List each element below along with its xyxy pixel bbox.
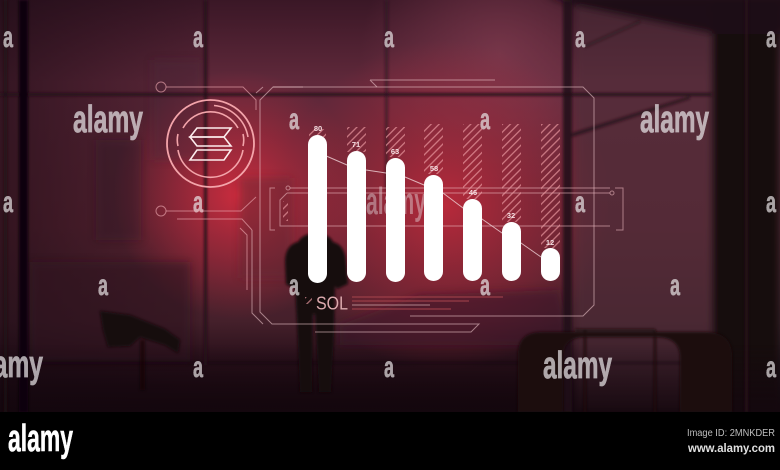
- bar value labels: 46: [469, 188, 477, 197]
- watermark: small a marks: a: [480, 103, 490, 136]
- trend line: [317, 152, 541, 257]
- footer: image id: Image ID: 2MNKDER: [687, 428, 775, 439]
- watermark: small a marks: a: [575, 186, 585, 219]
- watermark: alamy logos: alamy: [640, 99, 709, 141]
- bar value labels: 12: [546, 238, 554, 247]
- watermark: small a marks: a: [98, 269, 108, 302]
- HUD connectors left: [156, 82, 256, 290]
- watermark: small a marks: a: [480, 269, 490, 302]
- icon: Solana coin: [167, 100, 254, 187]
- footer: alamy logo: alamy: [8, 418, 73, 460]
- watermark: small a marks: a: [384, 21, 394, 54]
- bar value labels: 80: [314, 124, 322, 133]
- watermark: alamy logos: alamy: [543, 345, 612, 387]
- HUD side brackets and horizontal rails: [270, 186, 623, 230]
- hatched columns: [309, 124, 560, 248]
- footer: website: www.alamy.com: [687, 443, 775, 455]
- watermark: small a marks: a: [193, 351, 203, 384]
- watermark: small a marks: a: [575, 21, 585, 54]
- bar value labels: 63: [391, 147, 399, 156]
- watermark: small a marks: a: [3, 186, 13, 219]
- watermark: small a marks: a: [289, 269, 299, 302]
- bar value labels: [314, 124, 554, 247]
- watermark: small a marks: a: [3, 21, 13, 54]
- watermark: small a marks: a: [670, 269, 680, 302]
- watermark: small a marks: a: [384, 351, 394, 384]
- silhouette: office chair: [100, 311, 180, 390]
- watermark: small a marks: a: [289, 103, 299, 136]
- silhouette: desk and armchair: [518, 330, 732, 412]
- bar value labels: 58: [430, 164, 438, 173]
- SOL label: SOL: [316, 294, 348, 314]
- watermark: small a marks: a: [193, 21, 203, 54]
- bar value labels: 32: [507, 211, 515, 220]
- watermark: center alamy: alamy: [366, 181, 426, 223]
- bar value labels: 71: [352, 140, 360, 149]
- watermark: small a marks: a: [193, 186, 203, 219]
- watermark: alamy logos: [0, 99, 709, 387]
- bar chart: [308, 135, 560, 283]
- footer band: [0, 412, 780, 470]
- watermark: small a marks: [3, 21, 776, 384]
- watermark: alamy logos: alamy: [73, 99, 143, 141]
- silhouette: standing person: [285, 233, 348, 392]
- HUD frame: [252, 80, 594, 332]
- SOL label: [305, 294, 503, 314]
